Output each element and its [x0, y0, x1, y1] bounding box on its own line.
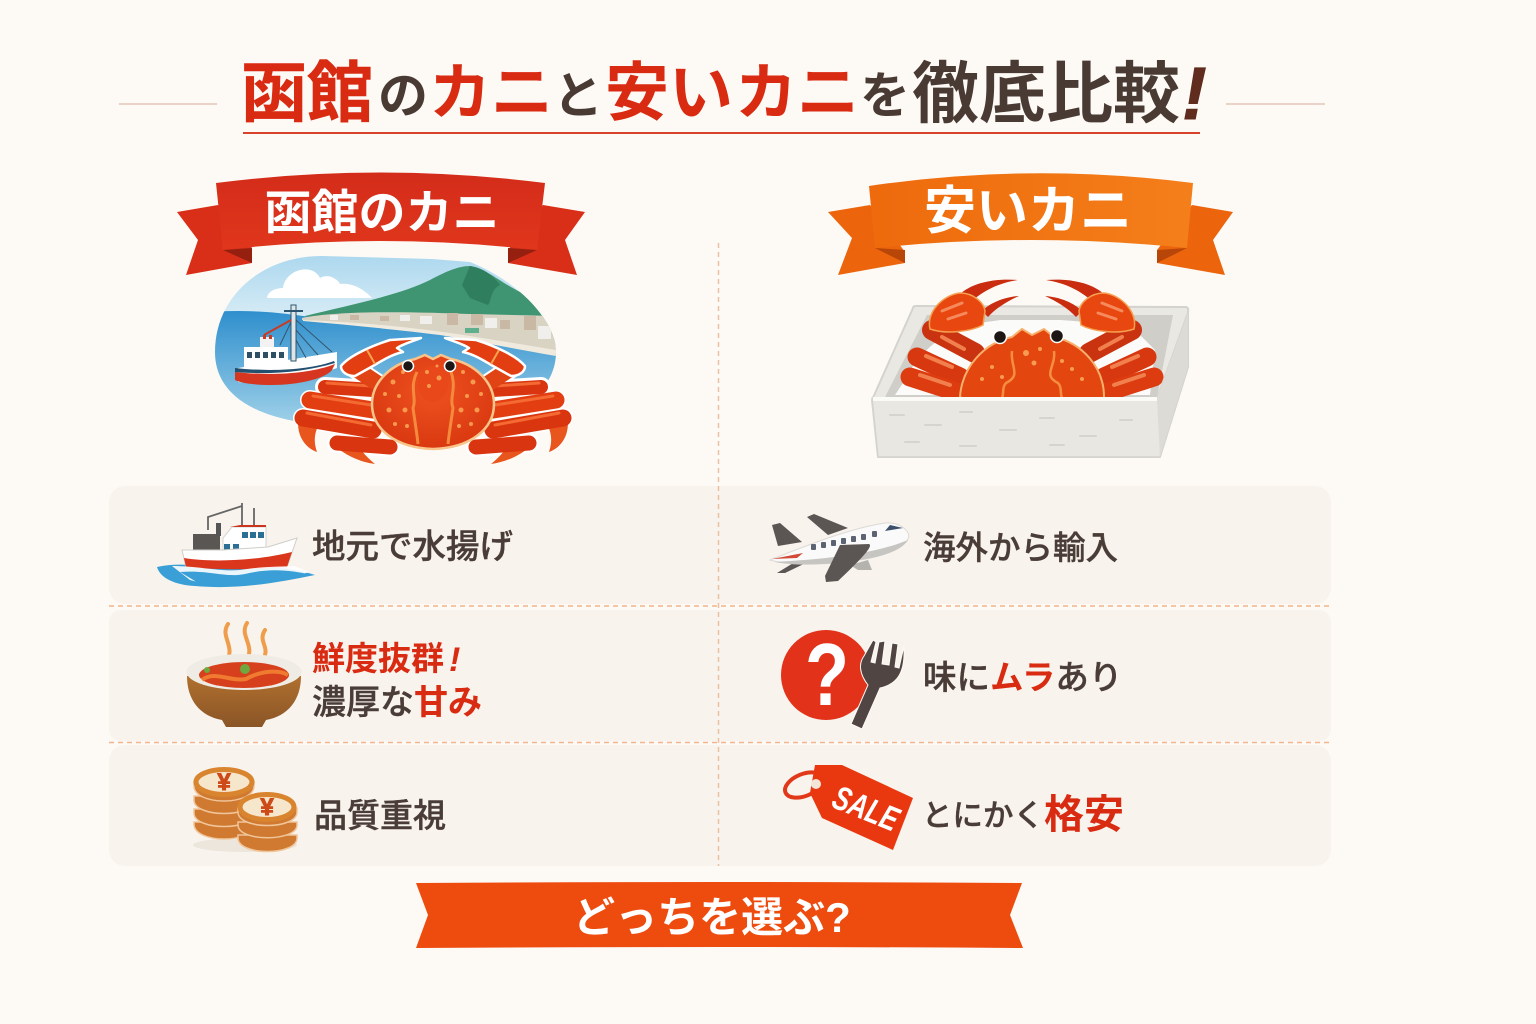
title: カニ	[735, 59, 859, 128]
comparison row bands	[109, 486, 1331, 866]
crab body in box	[900, 280, 1164, 397]
title: 安い	[605, 57, 733, 129]
illustration: Hakodate harbour scene	[215, 256, 556, 421]
title: 函館	[241, 56, 373, 130]
icon: question mark and fork	[781, 625, 904, 729]
title: を	[860, 68, 910, 124]
icon: yen coins: ¥	[260, 794, 274, 821]
title: 徹底比較	[912, 57, 1180, 132]
title: と	[553, 68, 603, 124]
title	[241, 52, 1207, 135]
crab shell	[372, 355, 494, 449]
ribbon: cheap crab	[828, 173, 1233, 275]
icon: yen coins	[193, 769, 297, 852]
banner label: どっちを選ぶ?	[573, 894, 851, 941]
row text: quality first: 品質重視	[314, 797, 446, 834]
foam box front	[872, 312, 1188, 457]
row text: inconsistent taste: 味にムラあり	[923, 660, 1122, 697]
crab eyes	[402, 360, 456, 372]
foam box back	[872, 306, 1188, 457]
icon: steaming bowl	[186, 623, 302, 727]
bottom banner	[416, 882, 1023, 948]
row text: just cheap	[922, 793, 1124, 837]
row text: freshness and sweetness: 濃厚な甘み	[312, 684, 482, 722]
title: の	[378, 68, 428, 124]
icon: yen coins: ¥	[217, 769, 231, 796]
mountain	[305, 266, 560, 345]
crushed ice	[895, 320, 1155, 395]
title: カニ	[429, 59, 553, 128]
row text: imported from overseas: 海外から輸入	[923, 530, 1118, 566]
row text: freshness and sweetness	[312, 640, 482, 722]
city shore	[302, 312, 556, 352]
fishing boat	[235, 305, 337, 385]
illustration: cheap crab in foam box	[872, 280, 1188, 457]
row text: just cheap: 格安	[1044, 793, 1124, 837]
title right rule	[1226, 104, 1325, 105]
ribbon label: Hakodate crab: 函館のカニ	[264, 186, 500, 239]
title: !	[1182, 52, 1207, 135]
ribbon label: cheap crab: 安いカニ	[924, 183, 1132, 241]
row text: freshness and sweetness: !	[449, 641, 460, 679]
icon: sale tag	[781, 765, 913, 850]
icon: fishing boat	[157, 503, 315, 587]
ribbon: Hakodate crab	[177, 172, 585, 275]
row text: freshness and sweetness: 鮮度抜群	[312, 640, 444, 677]
illustration: Hakodate crab	[298, 338, 568, 464]
sea	[210, 311, 560, 430]
title underline	[243, 132, 1200, 134]
cloud	[267, 269, 372, 298]
icon: sale tag: SALE	[827, 779, 905, 840]
row text: local landing: 地元で水揚げ	[312, 529, 513, 566]
row text: just cheap: とにかく	[922, 799, 1044, 833]
icon: airplane	[770, 514, 909, 582]
title left rule	[119, 104, 217, 105]
icon: question mark and fork: ?	[805, 625, 849, 724]
